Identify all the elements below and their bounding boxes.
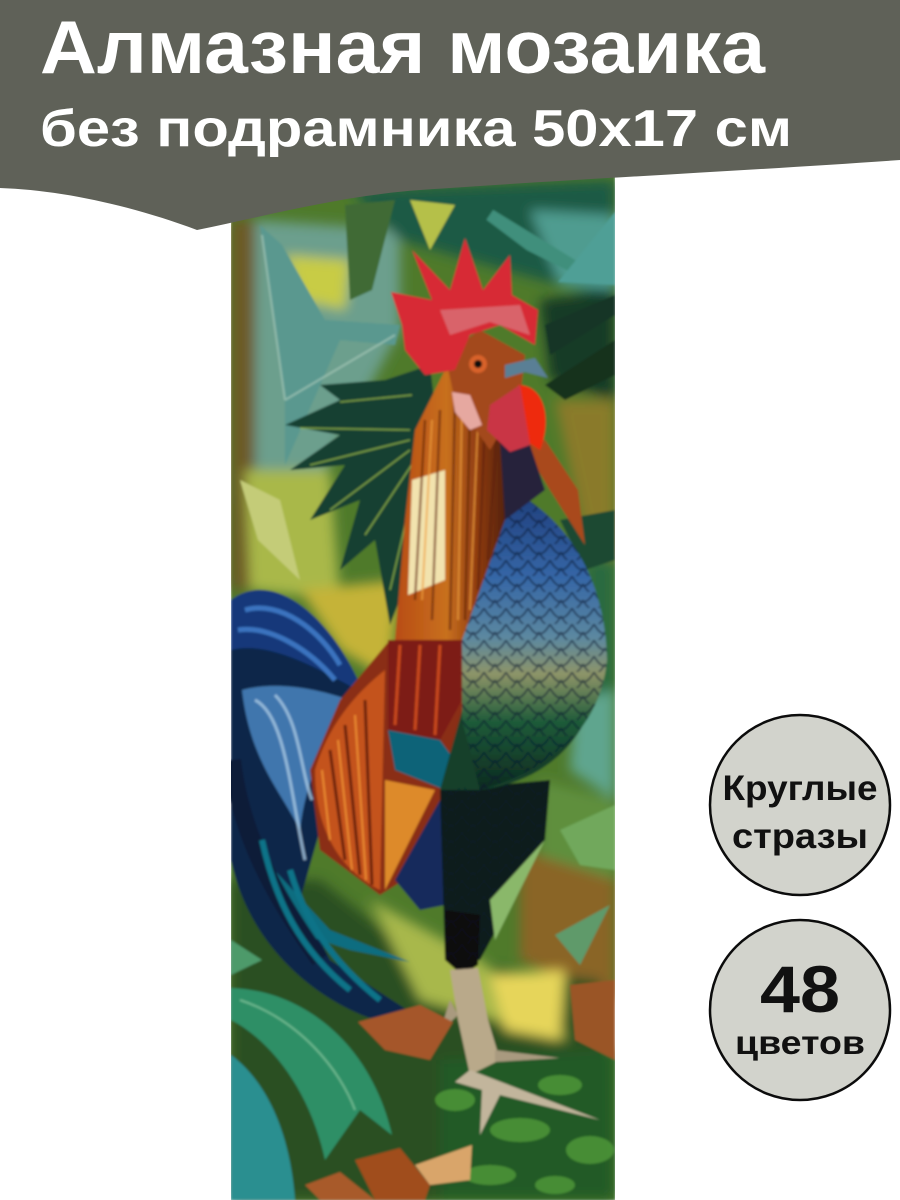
badge: round rhinestones — [710, 715, 890, 895]
body and saddle — [310, 640, 600, 975]
jungle background — [231, 170, 615, 1200]
badge: 48 colours: 48 — [760, 952, 840, 1026]
title: Алмазная мозаика — [40, 5, 766, 89]
subtitle: без подрамника 50х17 см — [40, 100, 792, 158]
breast plumage — [440, 485, 607, 960]
leg and foot — [440, 968, 600, 1135]
foreground leaves — [231, 805, 615, 1200]
tail feathers — [231, 590, 415, 1018]
neck hackles — [395, 365, 510, 640]
rooster painting — [231, 170, 615, 1200]
wattle — [518, 385, 546, 450]
big left leaf — [260, 225, 400, 465]
comb — [391, 238, 538, 375]
badge: 48 colours — [710, 920, 890, 1100]
badge: round rhinestones: Круглые — [722, 769, 878, 808]
badge: round rhinestones: стразы — [732, 817, 868, 856]
dark fan palm leaf — [285, 365, 440, 625]
badge: 48 colours: цветов — [735, 1024, 865, 1061]
beak and eye — [505, 358, 548, 378]
head — [445, 330, 525, 450]
clover ground cover — [435, 1075, 614, 1194]
header banner — [0, 0, 900, 230]
